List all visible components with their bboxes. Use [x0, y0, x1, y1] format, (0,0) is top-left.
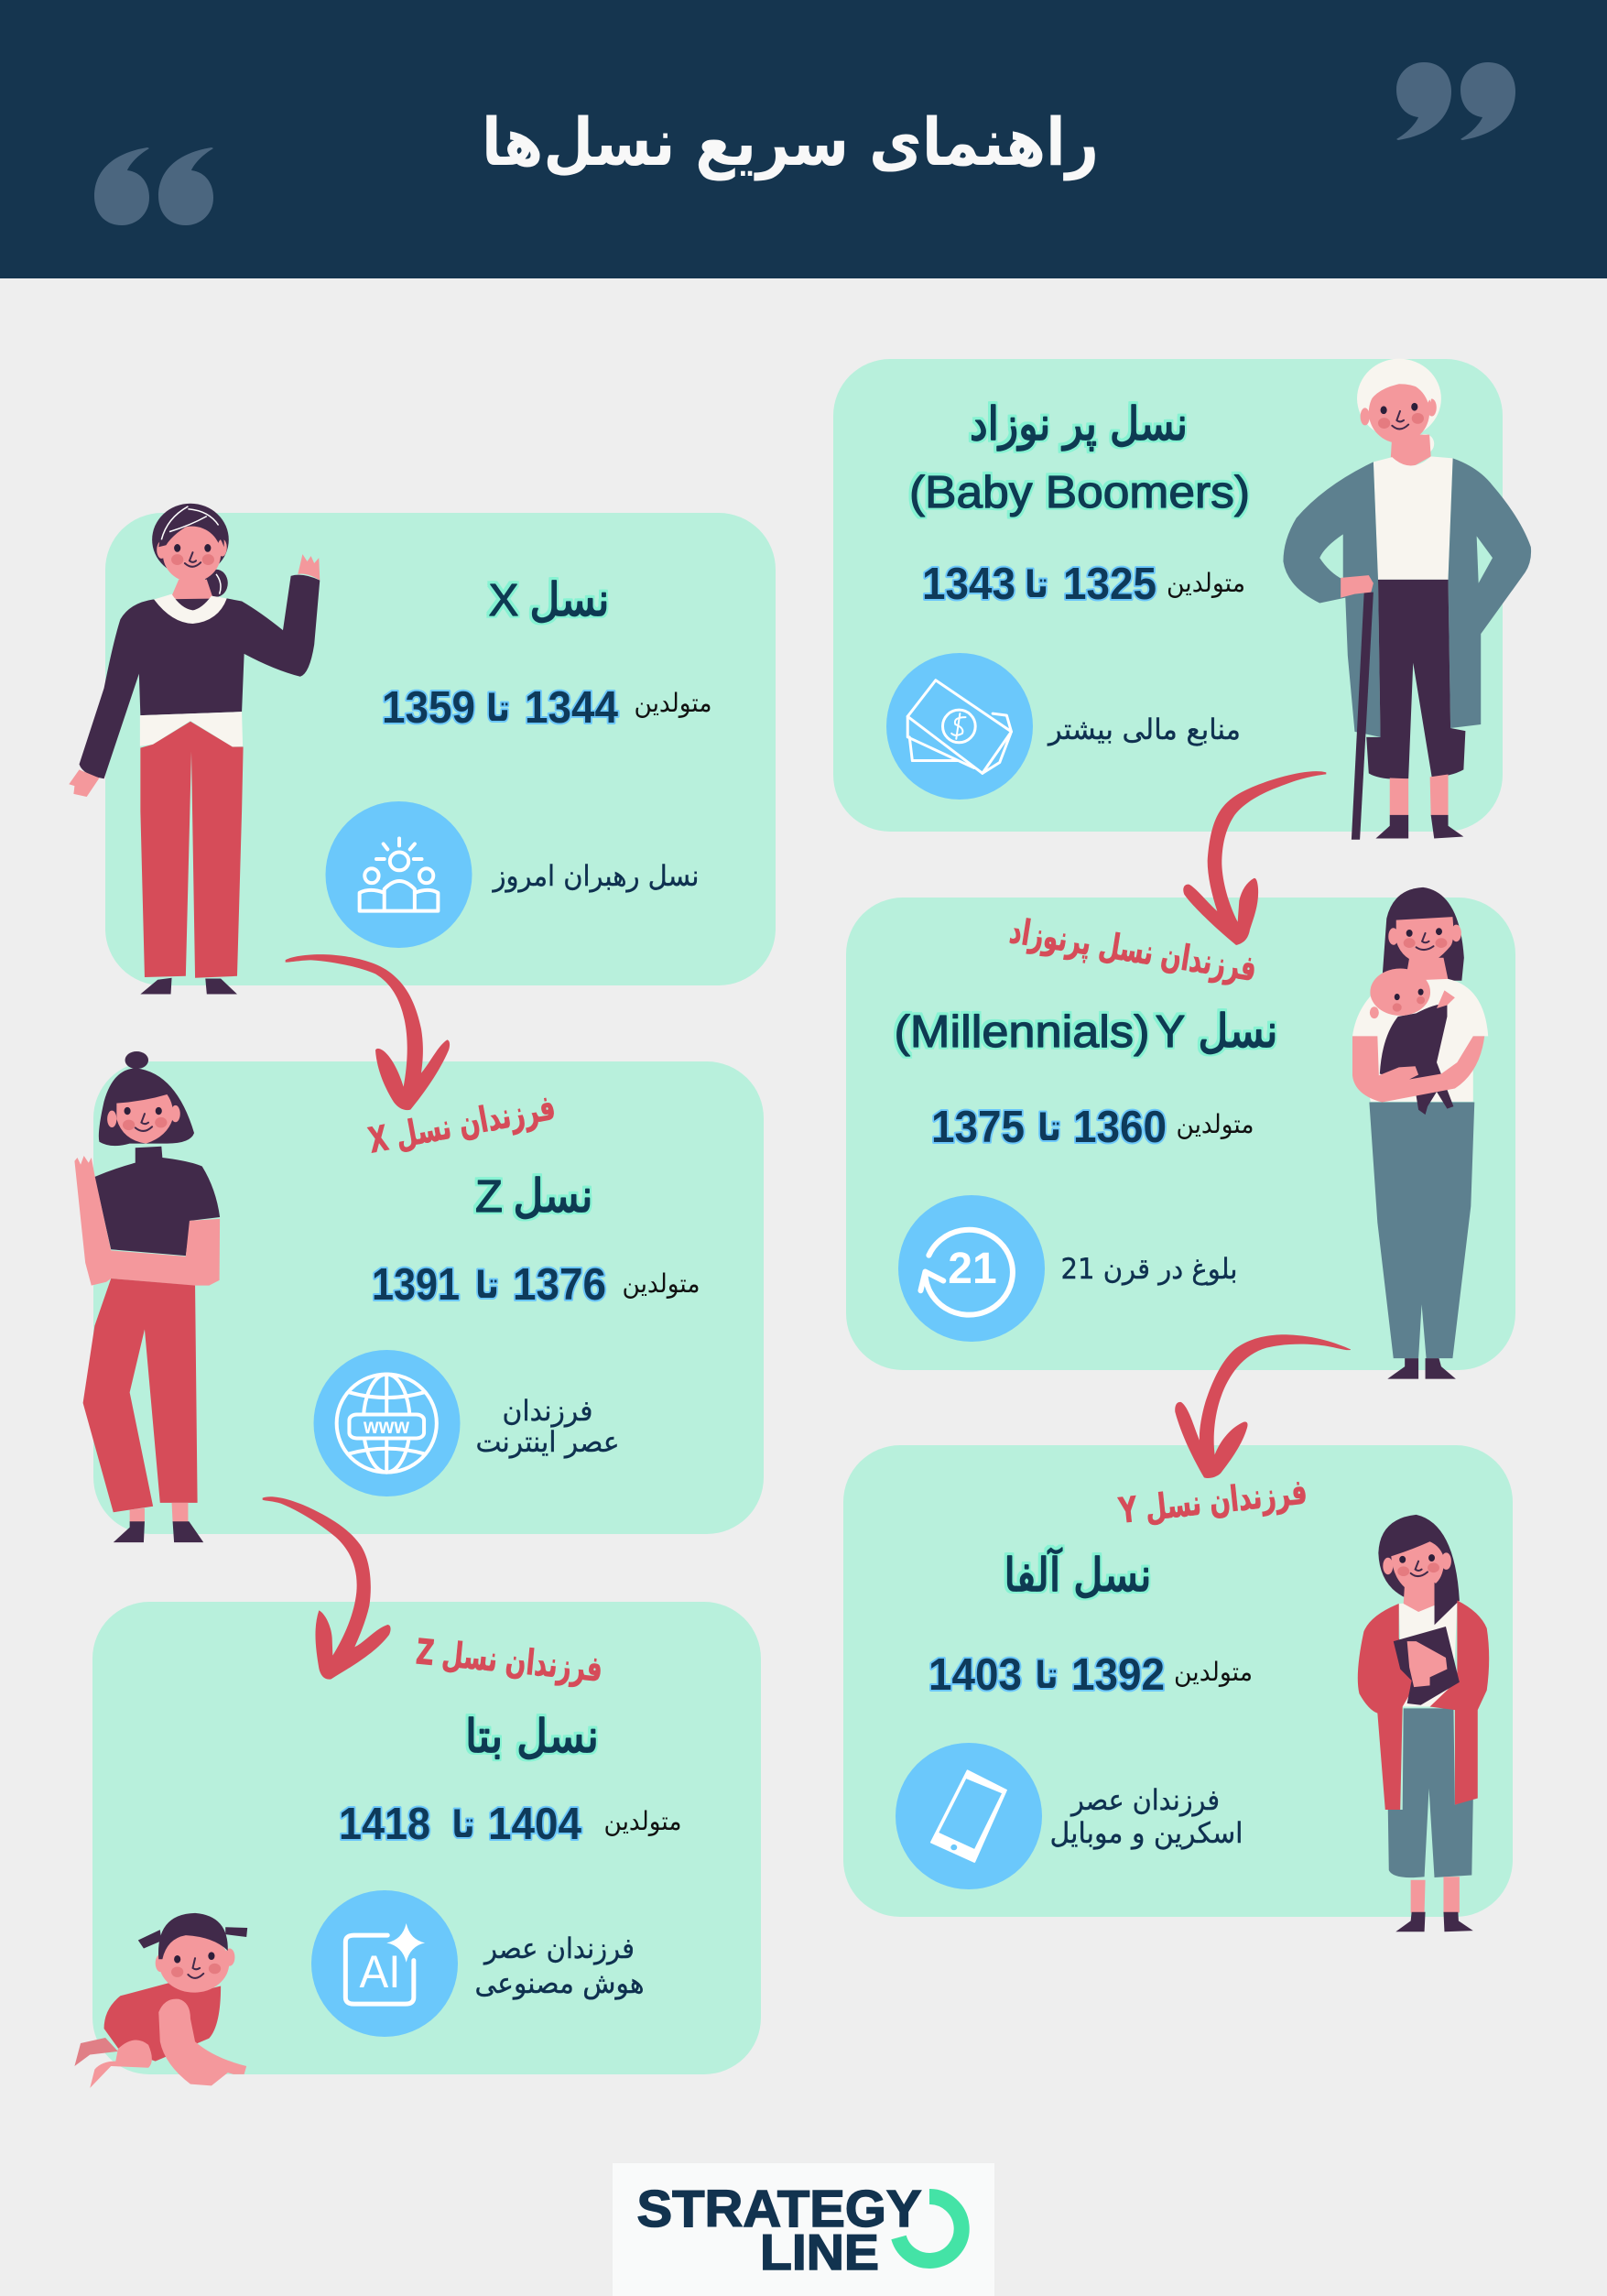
figure: elderly woman with cane — [1283, 359, 1531, 840]
birth years: تا — [1035, 1655, 1059, 1697]
heading: Generation Y: نسل — [1198, 1005, 1278, 1058]
heading: Baby Boomers — [909, 397, 1250, 517]
birth years — [339, 1800, 681, 1849]
feature text: هوش مصنوعی — [474, 1967, 645, 2000]
birth years: 1325 — [1063, 560, 1156, 609]
birth years: 1344 — [525, 683, 618, 733]
heading: Generation Y: (Millennials) — [894, 1007, 1150, 1057]
arrow: Y to Alpha — [1175, 1334, 1351, 1478]
heading: Generation Z: نسل — [513, 1170, 593, 1223]
birth years: متولدین — [1176, 1109, 1254, 1139]
heading: Baby Boomers: (Baby Boomers) — [909, 468, 1250, 517]
figure: waving woman — [69, 504, 320, 995]
birth years: متولدین — [1167, 568, 1245, 598]
child-of label: فرزندان نسل پرنوزاد — [1007, 910, 1259, 989]
figure: girl with tablet — [1358, 1515, 1489, 1931]
panel: Generation X — [69, 504, 776, 995]
feature text: منابع مالی بیشتر — [1047, 713, 1241, 746]
birth years: متولدین — [634, 688, 712, 718]
logo ring — [899, 2196, 961, 2260]
heading: Generation Alpha: نسل آلفا — [1004, 1548, 1152, 1602]
birth years: متولدین — [1174, 1657, 1253, 1687]
logo wordmark: LINE — [760, 2224, 879, 2280]
birth years: متولدین — [604, 1806, 681, 1836]
heading: Generation X: نسل — [529, 573, 610, 626]
logo wordmark: STRATEGY — [637, 2180, 921, 2238]
birth years: 1391 — [372, 1260, 460, 1310]
figure: crawling baby — [74, 1913, 247, 2088]
icon: AI: AI — [359, 1946, 401, 1997]
figure: young woman — [74, 1051, 220, 1542]
header band — [0, 0, 1607, 278]
icon: globe www: www — [363, 1414, 409, 1438]
heading: Generation Y — [894, 1005, 1278, 1058]
birth years: 1360 — [1073, 1103, 1167, 1152]
feature text: فرزندان — [502, 1395, 593, 1428]
feature text: نسل رهبران امروز — [492, 860, 700, 893]
feature text — [474, 1932, 645, 2000]
heading: Generation X: X — [489, 576, 518, 626]
icon: phone — [896, 1743, 1042, 1889]
feature text: فرزندان عصر — [1070, 1784, 1220, 1817]
feature text: فرزندان عصر — [483, 1932, 635, 1965]
birth years: متولدین — [623, 1268, 700, 1299]
panel: Generation Alpha — [843, 1445, 1513, 1931]
logo wordmark — [637, 2180, 921, 2280]
child-of label: فرزندان نسل Y — [1116, 1471, 1308, 1531]
child-of label: فرزندان نسل Z — [415, 1631, 604, 1690]
birth years — [372, 1260, 700, 1310]
panel: Generation Z — [74, 1051, 764, 1542]
panel: Generation Y — [846, 887, 1515, 1379]
feature text: عصر اینترنت — [476, 1426, 619, 1459]
feature text — [476, 1395, 619, 1459]
heading: Generation Z: Z — [475, 1172, 503, 1222]
title: راهنمای سریع نسل‌ها — [482, 103, 1099, 181]
feature text: بلوغ در قرن 21 — [1060, 1253, 1238, 1286]
birth years — [931, 1103, 1254, 1152]
birth years: 1404 — [488, 1800, 581, 1849]
feature text — [1049, 1784, 1243, 1850]
birth years: 1392 — [1071, 1650, 1165, 1700]
panel: Baby Boomers — [833, 359, 1531, 840]
figure: mother holding baby — [1352, 887, 1488, 1379]
birth years: 1403 — [928, 1650, 1022, 1700]
icon: 21st century — [898, 1195, 1045, 1342]
birth years: تا — [1037, 1107, 1061, 1149]
icon: AI — [311, 1890, 458, 2037]
birth years: تا — [486, 688, 510, 730]
arrow: Z to Beta — [263, 1496, 391, 1680]
arrow: X to Z — [286, 954, 450, 1110]
icon: closing quote mark — [1396, 62, 1515, 140]
panel: Generation Beta — [74, 1602, 761, 2088]
heading: Baby Boomers: نسل پر نوزاد — [970, 397, 1188, 451]
heading: Generation Y: Y — [1156, 1007, 1185, 1057]
heading: Generation Z — [475, 1170, 593, 1223]
birth years: تا — [452, 1804, 474, 1846]
birth years — [382, 683, 712, 733]
icon: 21st century: 21 — [948, 1245, 997, 1293]
arrow: Baby Boomers to Y — [1183, 771, 1326, 945]
birth years — [928, 1650, 1253, 1700]
icon: globe www — [313, 1350, 460, 1496]
heading: Generation Beta: نسل بتا — [465, 1710, 599, 1763]
birth years: تا — [1025, 564, 1048, 606]
birth years — [922, 560, 1245, 609]
child-of label: فرزندان نسل X — [365, 1087, 559, 1160]
birth years: 1418 — [339, 1800, 430, 1849]
birth years: 1359 — [382, 683, 475, 733]
birth years: 1343 — [922, 560, 1015, 609]
icon: leaders — [326, 801, 472, 948]
logo: Strategy Line — [613, 2163, 994, 2296]
feature text: اسکرین و موبایل — [1049, 1817, 1243, 1850]
birth years: تا — [475, 1265, 499, 1307]
birth years: 1376 — [513, 1260, 606, 1310]
icon: opening quote mark — [94, 147, 213, 225]
birth years: 1375 — [931, 1103, 1025, 1152]
icon: money — [886, 653, 1033, 800]
heading: Generation X — [489, 573, 610, 626]
